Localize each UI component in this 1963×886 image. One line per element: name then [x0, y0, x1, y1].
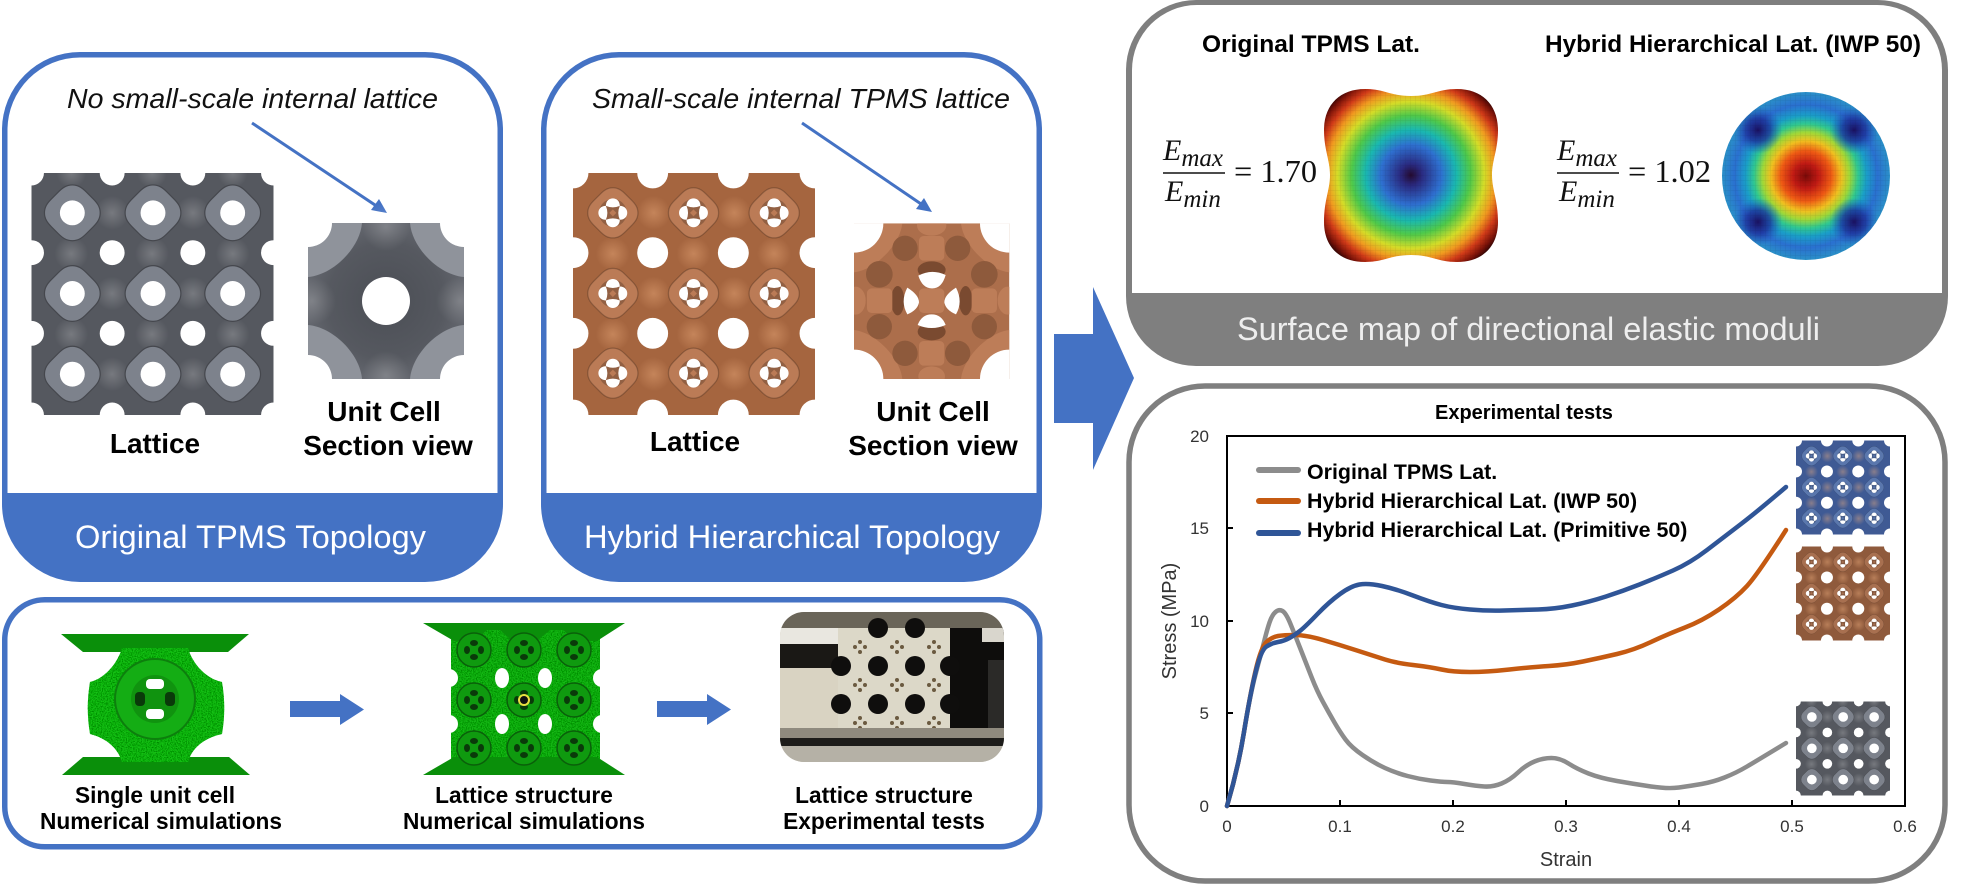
curve: original TPMS — [1227, 610, 1786, 806]
thumbnail: primitive lattice — [1790, 435, 1896, 540]
label: single unit cell: Single unit cell — [75, 782, 235, 808]
arrow: to grey unit cell — [252, 123, 387, 213]
formula: ratio 1.02: E — [1557, 134, 1575, 167]
formula: ratio 1.70 — [1162, 134, 1317, 213]
y axis tick labels — [1190, 427, 1209, 816]
thumbnail: original lattice — [1791, 696, 1895, 800]
grey lattice — [19, 158, 286, 427]
label: lattice experiments: Experimental tests — [783, 808, 985, 834]
formula: ratio 1.02: E — [1559, 175, 1577, 208]
grey unit cell section — [284, 199, 488, 403]
panel: experimental tests — [1129, 386, 1945, 881]
surface map: hybrid — [1720, 90, 1892, 262]
x axis tick labels: 0.5 — [1780, 817, 1804, 836]
label: single unit cell: Numerical simulations — [40, 808, 282, 834]
header: hybrid hierarchical topology: Hybrid Hierarchical Topology — [584, 519, 1000, 555]
formula: ratio 1.70: = 1.70 — [1234, 153, 1317, 189]
legend: Hybrid Hierarchical Lat. (IWP 50) — [1307, 489, 1637, 513]
panel: surface map of directional moduli — [1126, 0, 1948, 366]
panel: simulation and experiment workflow — [5, 600, 1040, 847]
y axis tick labels: 15 — [1190, 519, 1209, 538]
arrow: to copper unit cell — [802, 123, 932, 212]
label: lattice simulations: Numerical simulations — [403, 808, 645, 834]
x axis tick labels: 0.3 — [1554, 817, 1578, 836]
arrow: simulation step 2 to 3 — [657, 694, 731, 725]
single unit cell simulation — [61, 634, 250, 775]
panel: original TPMS topology — [2, 52, 503, 582]
y axis tick labels: 0 — [1200, 797, 1209, 816]
caption: internal TPMS lattice: Small-scale internal TPMS lattice — [592, 83, 1010, 114]
label: lattice experiments: Lattice structure — [795, 782, 973, 808]
label: unit cell section view: Unit Cell — [876, 396, 990, 427]
legend: Hybrid Hierarchical Lat. (Primitive 50) — [1307, 518, 1687, 542]
stress-strain chart — [1159, 427, 1917, 871]
header: surface map: Surface map of directional elastic moduli — [1237, 311, 1820, 347]
lattice structure simulation — [423, 623, 625, 775]
label: unit cell section view: Unit Cell — [327, 396, 441, 427]
formula: ratio 1.70: min — [1183, 186, 1221, 213]
x axis tick labels: 0.6 — [1893, 817, 1917, 836]
x axis tick labels — [1222, 817, 1917, 836]
y axis tick labels: 10 — [1190, 612, 1209, 631]
y axis title: Stress (MPa) — [1159, 563, 1181, 679]
legend — [1259, 460, 1687, 542]
arrow: simulation step 1 to 2 — [290, 694, 364, 725]
x axis tick labels: 0.1 — [1328, 817, 1352, 836]
x axis tick labels: 0.4 — [1667, 817, 1691, 836]
heading: hybrid lattice: Hybrid Hierarchical Lat. (IWP 50) — [1545, 31, 1921, 58]
heading: original lattice: Original TPMS Lat. — [1202, 31, 1420, 58]
label: lattice: Lattice — [110, 428, 200, 459]
y axis tick labels: 5 — [1200, 704, 1209, 723]
header: original TPMS topology: Original TPMS Topology — [75, 519, 426, 555]
formula: ratio 1.70: max — [1181, 145, 1223, 172]
panel: hybrid hierarchical topology — [541, 52, 1042, 582]
surface map: original — [1320, 85, 1502, 267]
legend: Original TPMS Lat. — [1307, 460, 1497, 484]
copper unit cell section — [854, 223, 1010, 379]
label: unit cell section view: Section view — [303, 430, 473, 461]
y axis tick labels: 20 — [1190, 427, 1209, 446]
label: lattice simulations: Lattice structure — [435, 782, 613, 808]
x axis tick labels: 0.2 — [1441, 817, 1465, 836]
curve: hybrid IWP 50 — [1227, 530, 1786, 806]
formula: ratio 1.02: = 1.02 — [1628, 153, 1711, 189]
thumbnail: IWP lattice — [1790, 541, 1896, 646]
formula: ratio 1.70: E — [1163, 134, 1181, 167]
arrow: large connector to results — [1054, 287, 1134, 470]
formula: ratio 1.02 — [1556, 134, 1711, 213]
x axis tick labels: 0 — [1222, 817, 1232, 836]
caption: no small-scale lattice: No small-scale internal lattice — [67, 83, 438, 114]
formula: ratio 1.02: min — [1577, 186, 1615, 213]
label: lattice: Lattice — [650, 426, 740, 457]
experimental test photo — [780, 612, 1004, 762]
label: unit cell section view: Section view — [848, 430, 1018, 461]
formula: ratio 1.70: E — [1165, 175, 1183, 208]
heading: experimental tests: Experimental tests — [1435, 402, 1613, 424]
copper lattice — [558, 158, 830, 430]
formula: ratio 1.02: max — [1575, 145, 1617, 172]
curve: hybrid Primitive 50 — [1227, 487, 1786, 806]
x axis title: Strain — [1540, 849, 1592, 871]
chart axes — [1227, 436, 1905, 806]
